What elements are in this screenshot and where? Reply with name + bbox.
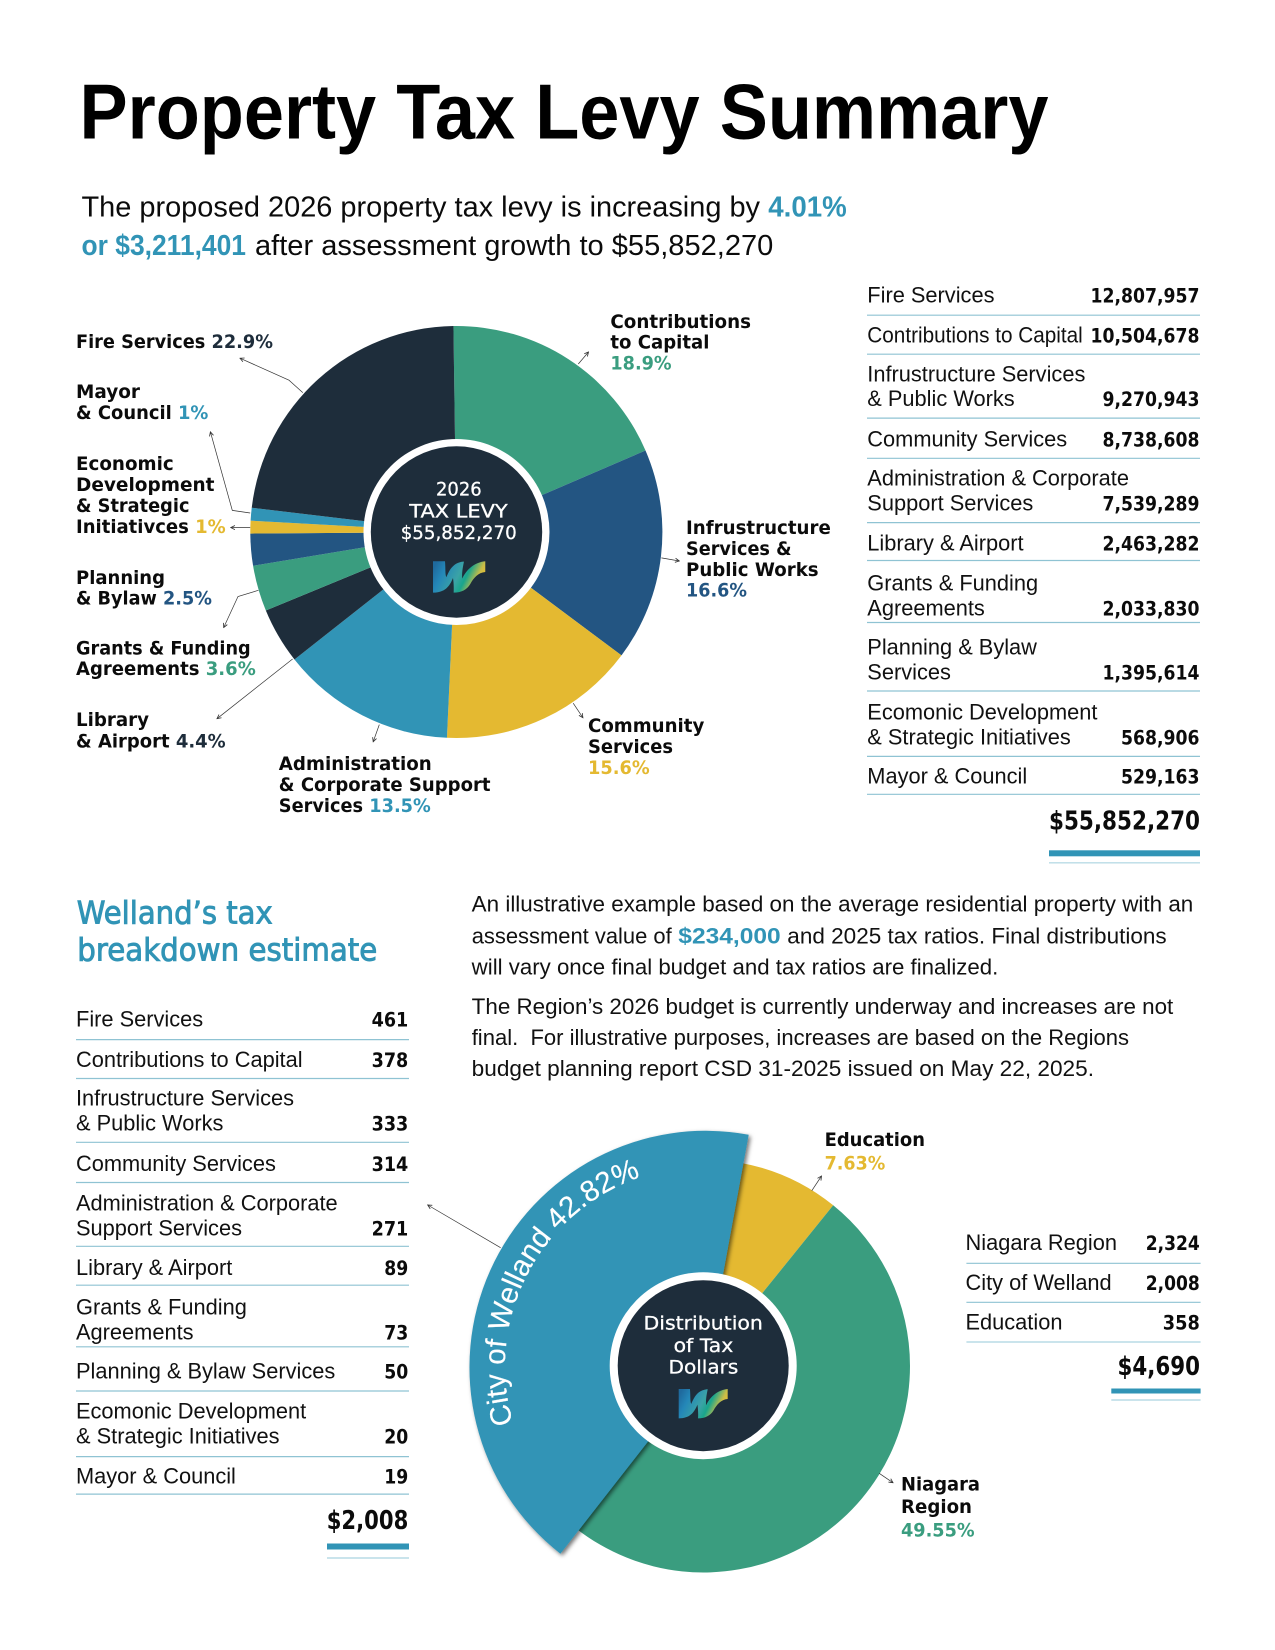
table: tax levy by service: 2,033,830 bbox=[1102, 598, 1200, 621]
title: Property Tax Levy Summary bbox=[80, 67, 1048, 155]
slice: library and airport bbox=[266, 532, 456, 659]
label: grants and funding bbox=[76, 637, 256, 680]
pie labels bbox=[76, 311, 831, 817]
centre label: Distribution bbox=[644, 1313, 763, 1335]
chart: 2026 tax levy pie bbox=[250, 326, 662, 738]
table: Welland breakdown: 20 bbox=[384, 1426, 408, 1449]
label: planning and bylaw: Planning bbox=[76, 567, 165, 589]
table: Welland breakdown: Administration & Corporate bbox=[76, 1191, 338, 1216]
table: Welland breakdown: Mayor & Council bbox=[76, 1463, 236, 1488]
table: tax levy by service: Ecomonic Development bbox=[867, 700, 1097, 725]
table: tax levy by service: 568,906 bbox=[1121, 727, 1200, 750]
table: tax levy by service: 9,270,943 bbox=[1102, 388, 1200, 411]
slice: community services bbox=[447, 532, 622, 738]
label: library and airport: Library bbox=[76, 709, 150, 731]
table: Welland breakdown: Contributions to Capital bbox=[76, 1047, 303, 1072]
centre disc bbox=[371, 446, 542, 618]
explanatory paragraphs bbox=[471, 892, 1193, 1081]
slice: mayor and council bbox=[251, 508, 456, 532]
table: Welland breakdown: 271 bbox=[372, 1218, 408, 1241]
table: distribution of tax dollars: Niagara Region bbox=[966, 1230, 1117, 1255]
slice: education bbox=[704, 1163, 833, 1366]
slice: grants and funding bbox=[253, 532, 456, 610]
slice: administration bbox=[294, 532, 456, 738]
heading: Welland's tax breakdown: breakdown estimate bbox=[77, 933, 377, 969]
centre label: 2026 bbox=[436, 478, 482, 500]
centre label: TAX LEVY bbox=[408, 500, 508, 522]
table: Welland breakdown: Community Services bbox=[76, 1151, 276, 1176]
explanatory paragraphs: will vary once final budget and tax ratios are finalized. bbox=[471, 954, 998, 979]
intro text: or $3,211,401 bbox=[82, 230, 246, 262]
slice: infrastructure services bbox=[456, 450, 662, 655]
label: mayor and council: & Council 1% bbox=[76, 402, 208, 424]
table: Welland breakdown: 461 bbox=[372, 1008, 408, 1031]
total: distribution: $4,690 bbox=[1118, 1352, 1200, 1382]
slice: contributions to capital bbox=[453, 326, 646, 532]
table: distribution of tax dollars: 358 bbox=[1163, 1311, 1200, 1334]
label: Niagara Region: 49.55% bbox=[901, 1520, 975, 1542]
label: contributions to capital: 18.9% bbox=[610, 353, 672, 375]
explanatory paragraphs: $234,000 bbox=[678, 923, 781, 948]
table: tax levy by service: Grants & Funding bbox=[867, 571, 1038, 596]
label: community services: 15.6% bbox=[588, 757, 650, 779]
icon: Welland logo bbox=[679, 1389, 728, 1418]
table: Welland breakdown: Grants & Funding bbox=[76, 1295, 247, 1320]
table: distribution of tax dollars: City of Welland bbox=[966, 1270, 1112, 1295]
heading: Welland's tax breakdown: Welland’s tax bbox=[77, 896, 273, 932]
label: mayor and council: Mayor bbox=[76, 381, 141, 403]
table: Welland breakdown: 89 bbox=[384, 1257, 408, 1280]
label: infrastructure services: Infrustructure bbox=[686, 517, 831, 539]
label: economic development bbox=[76, 453, 226, 538]
intro text: The proposed 2026 property tax levy is increasing by bbox=[82, 192, 760, 224]
table: tax levy by service bbox=[867, 282, 1200, 863]
slice: economic development bbox=[250, 521, 456, 534]
label: planning and bylaw: & Bylaw 2.5% bbox=[76, 587, 212, 609]
label: education: 7.63% bbox=[825, 1152, 885, 1174]
table: tax levy by service: 1,395,614 bbox=[1102, 662, 1200, 684]
slice: Niagara Region bbox=[576, 1205, 910, 1572]
table: Welland breakdown: Infrustructure Services bbox=[76, 1086, 294, 1111]
table: tax levy by service: Planning & Bylaw bbox=[867, 635, 1037, 660]
table: Welland breakdown: Agreements bbox=[76, 1320, 194, 1345]
label: education bbox=[825, 1129, 925, 1174]
label: library and airport bbox=[76, 709, 226, 752]
table: tax levy by service: Library & Airport bbox=[867, 530, 1024, 556]
intro text: 4.01% bbox=[768, 192, 847, 224]
table: tax levy by service: & Strategic Initiatives bbox=[867, 725, 1071, 750]
total: tax levy: $55,852,270 bbox=[1049, 806, 1200, 836]
label: library and airport: & Airport 4.4% bbox=[76, 730, 226, 752]
table: tax levy by service: Services bbox=[867, 660, 951, 684]
table: Welland breakdown: 50 bbox=[384, 1360, 408, 1384]
table: Welland breakdown: Support Services bbox=[76, 1216, 242, 1241]
centre label bbox=[644, 1313, 763, 1379]
table: Welland breakdown: & Public Works bbox=[76, 1111, 223, 1136]
label: infrastructure services: 16.6% bbox=[686, 579, 747, 601]
table: distribution of tax dollars bbox=[966, 1230, 1201, 1400]
table: Welland breakdown: & Strategic Initiatives bbox=[76, 1424, 280, 1449]
label: planning and bylaw bbox=[76, 567, 212, 609]
label: administration: & Corporate Support bbox=[279, 774, 490, 796]
table: Welland breakdown: Ecomonic Development bbox=[76, 1399, 306, 1424]
table: tax levy by service: & Public Works bbox=[867, 386, 1015, 411]
label: community services: Community bbox=[588, 715, 705, 737]
explanatory paragraphs: An illustrative example based on the average residential property with an bbox=[472, 892, 1193, 917]
label: contributions to capital: Contributions bbox=[610, 311, 751, 333]
label: administration: Administration bbox=[279, 753, 432, 775]
label: economic development: Development bbox=[76, 474, 214, 496]
explanatory paragraphs: and 2025 tax ratios. Final distributions bbox=[787, 923, 1167, 948]
label: Niagara Region: Niagara bbox=[901, 1473, 980, 1495]
table: tax levy by service: 10,504,678 bbox=[1090, 325, 1200, 348]
label: administration bbox=[279, 753, 490, 817]
centre label: of Tax bbox=[674, 1335, 733, 1357]
centre ring bbox=[364, 439, 550, 625]
table: tax levy by service: Fire Services bbox=[867, 282, 995, 308]
label: community services bbox=[588, 715, 705, 779]
table: tax levy by service: 2,463,282 bbox=[1102, 532, 1200, 556]
table: Welland breakdown: Fire Services bbox=[76, 1006, 203, 1031]
table: tax levy by service: 529,163 bbox=[1121, 766, 1200, 789]
table: Welland breakdown bbox=[76, 1006, 409, 1558]
label: economic development: Economic bbox=[76, 453, 174, 475]
icon: Welland logo bbox=[433, 561, 485, 593]
label: infrastructure services bbox=[686, 517, 831, 601]
explanatory paragraphs: budget planning report CSD 31-2025 issued on May 22, 2025. bbox=[472, 1056, 1094, 1081]
table: tax levy by service: 8,738,608 bbox=[1102, 428, 1200, 451]
table: tax levy by service: Administration & Corporate bbox=[867, 466, 1129, 490]
table: tax levy by service: Agreements bbox=[867, 596, 985, 621]
slice: planning and bylaw bbox=[250, 532, 456, 566]
table: distribution of tax dollars: Education bbox=[966, 1309, 1062, 1334]
centre label bbox=[401, 478, 517, 544]
slice: fire services bbox=[252, 326, 456, 532]
label: education: Education bbox=[825, 1129, 925, 1151]
intro text bbox=[82, 192, 847, 262]
slice label: City of Welland 42.82%: City of Welland 42.82% bbox=[485, 1160, 638, 1425]
table: Welland breakdown: 73 bbox=[384, 1322, 408, 1345]
centre ring bbox=[610, 1272, 797, 1459]
table: tax levy by service: Community Services bbox=[867, 426, 1067, 451]
table: distribution of tax dollars: 2,324 bbox=[1146, 1232, 1200, 1255]
label: Niagara Region bbox=[901, 1473, 980, 1542]
table: Welland breakdown: 314 bbox=[372, 1153, 408, 1176]
label: infrastructure services: Public Works bbox=[686, 559, 819, 581]
heading: Welland's tax breakdown bbox=[77, 896, 377, 969]
label: grants and funding: Agreements 3.6% bbox=[76, 658, 256, 680]
centre disc bbox=[618, 1280, 789, 1451]
label: economic development: Initiativces 1% bbox=[76, 516, 226, 538]
slice: City of Welland (exploded) bbox=[469, 1131, 749, 1554]
table: tax levy by service: Support Services bbox=[867, 491, 1033, 516]
table: tax levy by service: Mayor & Council bbox=[867, 764, 1027, 789]
centre label: Dollars bbox=[668, 1357, 738, 1379]
intro text: after assessment growth to $55,852,270 bbox=[255, 230, 773, 262]
table: Welland breakdown: 378 bbox=[372, 1049, 408, 1072]
chart: distribution of tax dollars bbox=[468, 1130, 910, 1572]
table: Welland breakdown: 333 bbox=[372, 1113, 408, 1136]
label: mayor and council bbox=[76, 381, 208, 424]
label: contributions to capital: to Capital bbox=[610, 332, 709, 354]
table: Welland breakdown: Library & Airport bbox=[76, 1255, 232, 1280]
table: tax levy by service: 12,807,957 bbox=[1090, 284, 1200, 308]
table: tax levy by service: 7,539,289 bbox=[1102, 493, 1200, 516]
centre label: $55,852,270 bbox=[401, 522, 517, 544]
label: economic development: & Strategic bbox=[76, 495, 190, 517]
label: Niagara Region: Region bbox=[901, 1496, 972, 1518]
table: tax levy by service: Infrustructure Services bbox=[867, 361, 1085, 386]
table: Welland breakdown: Planning & Bylaw Services bbox=[76, 1358, 335, 1384]
total: Welland: $2,008 bbox=[327, 1506, 408, 1536]
label: administration: Services 13.5% bbox=[279, 795, 431, 817]
label: fire services: Fire Services 22.9% bbox=[76, 331, 273, 353]
label: infrastructure services: Services & bbox=[686, 538, 792, 560]
label: community services: Services bbox=[588, 736, 673, 758]
table: tax levy by service: Contributions to Capital bbox=[867, 323, 1083, 348]
pie leader arrows bbox=[210, 352, 679, 742]
explanatory paragraphs: assessment value of bbox=[472, 923, 673, 948]
label: contributions to capital bbox=[610, 311, 751, 375]
explanatory paragraphs: The Region’s 2026 budget is currently underway and increases are not bbox=[472, 994, 1173, 1019]
label: grants and funding: Grants & Funding bbox=[76, 637, 251, 659]
table: distribution of tax dollars: 2,008 bbox=[1146, 1272, 1200, 1295]
table: Welland breakdown: 19 bbox=[384, 1465, 408, 1488]
distribution leader arrows bbox=[428, 1176, 893, 1483]
explanatory paragraphs: final. For illustrative purposes, increases are based on the Regions bbox=[472, 1025, 1129, 1050]
